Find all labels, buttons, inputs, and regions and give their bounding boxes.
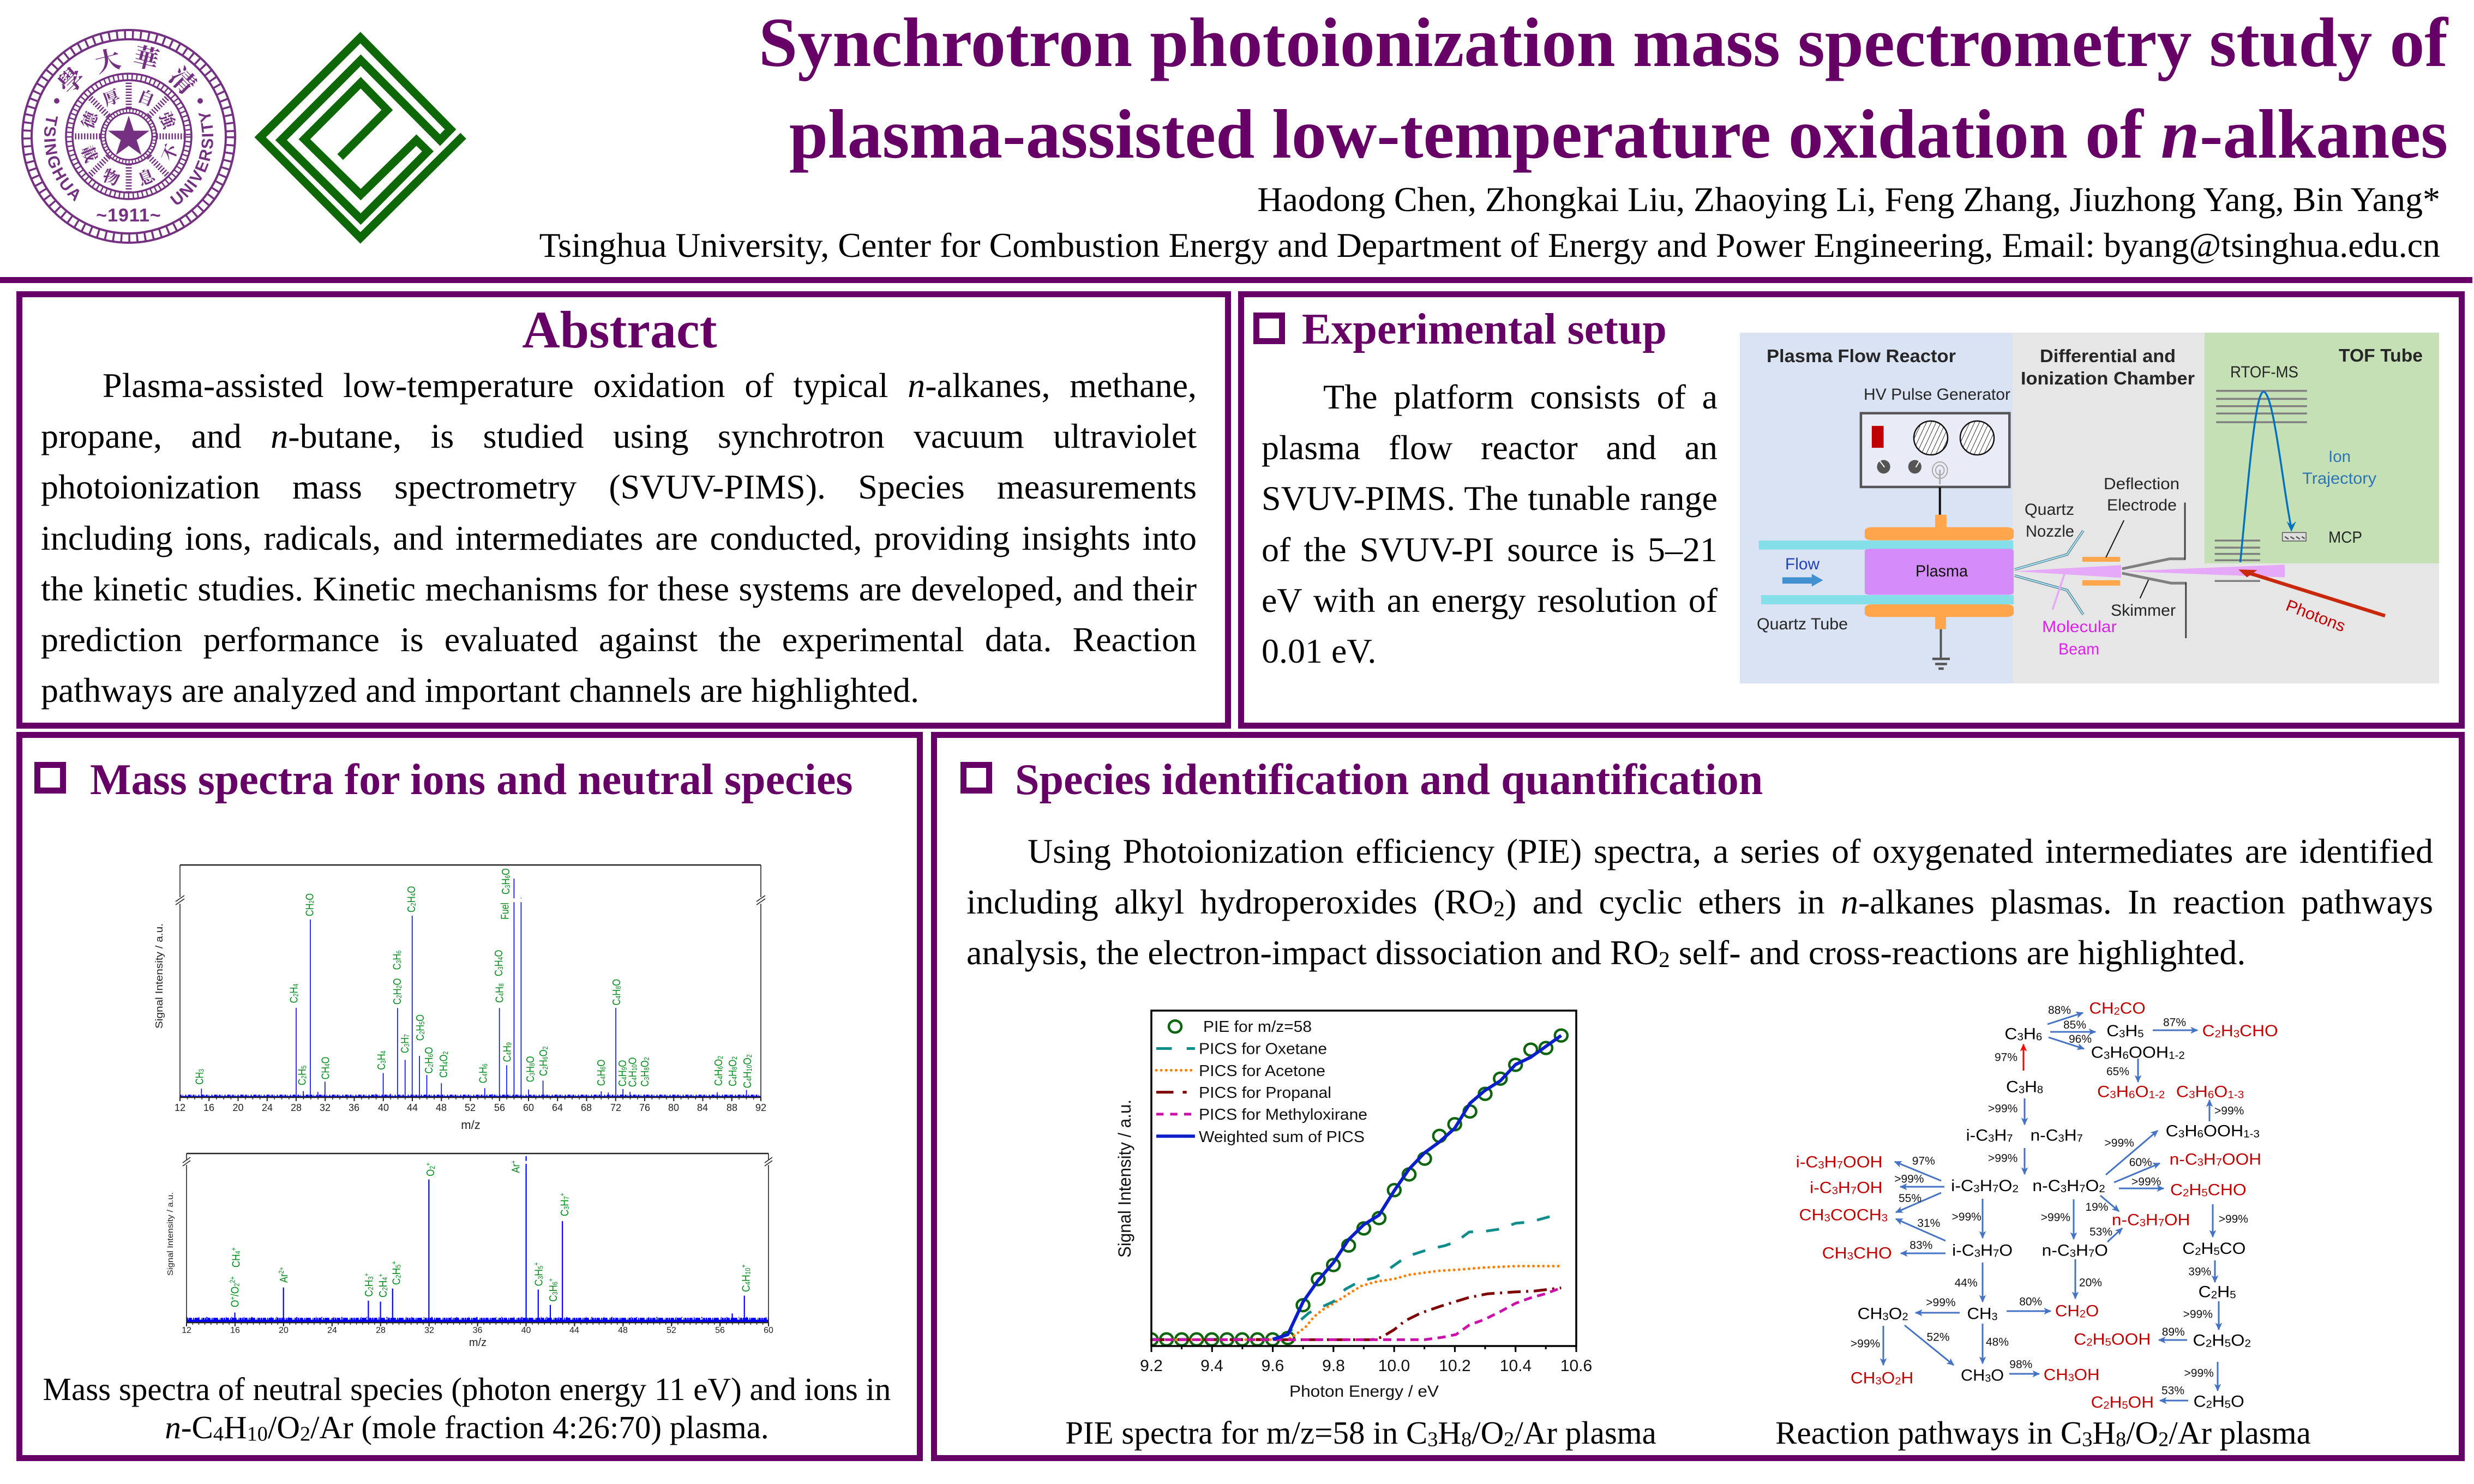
pathway arrows [1883,1013,2219,1401]
heading: experimental setup: Experimental setup [1302,305,1667,353]
component labels: HV Pulse Generator [1864,386,2010,404]
axis labels: 44 [569,1326,579,1335]
intermediate species: C3H6OOH 1-3 [2166,1122,2260,1140]
component labels: MCP [2328,528,2362,546]
intermediate species: i-C3H7 [1966,1126,2013,1144]
ion labels: C2H3+ [362,1273,375,1297]
component labels: Skimmer [2111,602,2176,620]
component labels: Plasma [1915,562,1968,580]
caption: reaction pathways: Reaction pathways in C3H8/O2/Ar plasma [1775,1415,2311,1451]
axis labels: 28 [376,1326,386,1335]
component labels: Trajectory [2302,470,2376,488]
experimental setup text: plasma flow reactor and an [1262,428,1718,467]
logo: Tsinghua University seal [21,29,236,244]
caption: mass spectra: Mass spectra of neutral species (photon energy 11 eV) and ions in [43,1371,891,1407]
branching percentages: >99% [1926,1296,1956,1309]
heading: species identification: Species identification and quantification [1015,756,1763,804]
branching percentages: >99% [2183,1308,2213,1321]
component labels: Electrode [2107,496,2177,514]
experimental setup text: 0.01 eV. [1262,632,1376,670]
intermediate species: C3H8 [2006,1078,2043,1096]
branching percentages: 53% [2161,1385,2184,1397]
logo: Tsinghua University seal: 厚 [99,82,123,111]
axis labels: 76 [639,1102,650,1113]
branching percentages: 55% [1899,1192,1921,1205]
species labels: C4H6 [478,1064,490,1083]
chart: reaction pathways [1796,1000,2278,1411]
branching percentages: >99% [1894,1173,1924,1185]
axis labels: 28 [291,1102,302,1113]
species labels: C4H6O2 [713,1056,725,1086]
experimental setup text [1262,377,1718,670]
axis labels: 92 [755,1102,766,1113]
branching percentages: 89% [2162,1326,2185,1338]
logo: Tsinghua University seal: 物 [100,162,124,190]
species labels: CH3 [194,1069,206,1085]
axis labels: 80 [668,1102,679,1113]
component labels [1757,363,2376,658]
species labels [194,868,754,1088]
axis labels: 10.2 [1439,1357,1471,1375]
product species in red: C2H5OH [2091,1393,2154,1411]
axis labels: 44 [407,1102,418,1113]
ion labels: Ar2+ [277,1267,290,1283]
intermediate species: i-C3H7O [1952,1242,2013,1260]
axis labels [1140,1357,1592,1375]
ion labels: C3H7+ [558,1193,571,1216]
component labels: Ion [2328,448,2351,466]
peaks [187,1156,768,1323]
ion labels: C2H4+ [376,1273,389,1297]
logo: Tsinghua University seal: UNIVERSITY [170,113,214,205]
species labels: CH4O [320,1057,332,1079]
component labels: Quartz Tube [1757,615,1848,633]
logo: Tsinghua University seal: 強 [154,107,183,133]
branching percentages: >99% [2184,1367,2214,1379]
intermediate species: C2H5O2 [2193,1332,2251,1350]
schematic: experimental apparatus [1740,333,2439,683]
branching percentages: >99% [1851,1338,1880,1350]
logo: Tsinghua University seal: 不 [154,140,183,164]
branching percentages: 85% [2063,1019,2086,1031]
axis labels: 32 [320,1102,331,1113]
component labels: Photons [2283,597,2348,635]
section titles: Ionization Chamber [2021,368,2195,388]
authors and affiliation: Haodong Chen, Zhongkai Liu, Zhaoying Li, Feng Zhang, Jiuzhong Yang, Bin Yang* [1257,180,2440,219]
species labels: C2H5O [415,1014,427,1041]
branching percentages: 19% [2085,1201,2108,1213]
axis labels [182,1326,773,1349]
section titles: Plasma Flow Reactor [1767,346,1956,366]
peaks [180,879,761,1097]
product species in red: CH2CO [2089,1000,2146,1018]
product species in red [1796,1000,2278,1411]
ion labels: C4H10+ [740,1264,753,1292]
species labels: C2H4 [288,984,300,1003]
legend text: PICS for Acetone [1199,1062,1325,1080]
title [759,4,2449,173]
axis labels: 16 [230,1326,240,1335]
branching percentages: >99% [2041,1211,2070,1224]
branching percentages: 88% [2048,1004,2071,1017]
axis labels: 52 [465,1102,476,1113]
axis labels: 60 [523,1102,534,1113]
section titles: Differential and [2040,346,2176,366]
product species in red: CH3O2H [1851,1369,1913,1387]
abstract text: propane, and n-butane, is studied using synchrotron vacuum ultraviolet [41,417,1197,455]
branching percentages: 98% [2009,1358,2032,1371]
species labels: C4H10O [627,1058,639,1087]
ion labels: O2+ [424,1163,437,1176]
legend text [1199,1018,1367,1146]
axis labels: 12 [182,1326,191,1335]
axis labels: 32 [424,1326,434,1335]
branching percentages: 60% [2129,1156,2152,1169]
intermediate species: i-C3H7O2 [1951,1177,2019,1195]
branching percentages: 20% [2079,1277,2102,1289]
branching percentages: >99% [1988,1152,2017,1165]
intermediate species: CH3 [1967,1305,1998,1323]
chart: neutral species mass spectrum [154,864,766,1132]
species labels: CH4O2 [438,1052,450,1078]
species labels: C2H6O2 [538,1046,550,1076]
caption: PIE spectra: PIE spectra for m/z=58 in C3H8/O2/Ar plasma [1065,1415,1656,1451]
legend text: PICS for Methyloxirane [1199,1106,1367,1123]
species labels: C4H9O [617,1060,629,1086]
axis labels: 20 [232,1102,244,1113]
axis labels: 40 [521,1326,531,1335]
axis labels: 10.0 [1378,1357,1410,1375]
component labels: Deflection [2104,475,2179,493]
axis labels: 24 [262,1102,273,1113]
product species in red: i-C3H7OOH [1796,1153,1883,1171]
legend text: PICS for Propanal [1199,1084,1331,1102]
ion labels: C3H5+ [532,1262,545,1286]
component labels: Quartz [2025,501,2074,519]
panel: abstract [16,291,1231,729]
product species in red: C2H5OOH [2074,1331,2151,1349]
product species in red: CH2O [2055,1302,2099,1320]
species labels: C3H6 [391,951,403,970]
intermediate species: C2H5 [2199,1283,2236,1301]
axis labels: 9.2 [1140,1357,1163,1375]
branching percentages: >99% [1951,1211,1981,1223]
logo: Tsinghua University seal: 學 [49,58,92,101]
logo: Tsinghua University seal: 華 [130,37,163,77]
heading: abstract: Abstract [522,301,717,359]
logo: Tsinghua University seal: 清 [163,58,206,101]
branching percentages: >99% [2104,1137,2134,1149]
branching percentages: 87% [2163,1016,2186,1029]
intermediate species: C3H5 [2106,1022,2144,1040]
ion labels: O+/O22+ [228,1276,241,1307]
ion labels [228,1160,753,1307]
chart: neutral species mass spectrum: Signal Intensity / a.u. [154,923,165,1029]
experimental setup text: SVUV-PIMS. The tunable range [1262,479,1718,518]
species labels: Fuel [500,903,512,920]
species labels: C2H4O [406,886,418,912]
legend symbols [1156,1020,1195,1136]
branching percentages: 52% [1926,1331,1950,1343]
logo: Tsinghua University seal: 德 [74,106,103,131]
ion labels: Ar+ [509,1160,522,1173]
abstract text: photoionization mass spectrometry (SVUV-PIMS). Species measurements [41,467,1197,506]
caption: mass spectra [43,1371,891,1445]
logo: Tsinghua University seal: 息 [134,161,159,190]
axis labels: 24 [327,1326,337,1335]
logo: Tsinghua University seal: 載 [76,141,105,165]
chart: ion mass spectrum: Signal Intensity / a.u. [166,1192,175,1276]
title: Synchrotron photoionization mass spectrometry study of [759,4,2448,81]
logo: Tsinghua University seal: TSINGHUA [44,116,80,202]
product species in red: C3H6O1-2 [2097,1083,2165,1101]
species labels: C3H4O [493,950,505,976]
intermediate species: n-C3H7O [2042,1242,2108,1260]
section titles: TOF Tube [2339,345,2423,365]
axis labels: 36 [473,1326,482,1335]
axis labels: 36 [349,1102,359,1113]
legend text: Weighted sum of PICS [1199,1128,1365,1146]
branching percentages: >99% [2131,1175,2161,1188]
branching percentages: 96% [2069,1033,2092,1046]
ion labels: C2H5+ [389,1261,403,1285]
axis labels: 64 [552,1102,563,1113]
axis labels: 9.8 [1322,1357,1345,1375]
product species in red: CH3CHO [1822,1244,1892,1262]
intermediate species: n-C3H7O2 [2032,1177,2105,1195]
species text: Using Photoionization efficiency (PIE) spectra, a series of oxygenated intermediates are identified [1028,832,2433,870]
branching percentages: >99% [1988,1103,2017,1115]
intermediate species: C3H6 [2004,1025,2042,1043]
intermediate species: C2H5O [2194,1393,2244,1411]
logo: Tsinghua University seal: 大 [91,39,124,80]
branching percentages: 83% [1909,1239,1932,1252]
axis labels: m/z [469,1337,487,1349]
branching percentages: 65% [2106,1066,2129,1078]
species labels: C3H6O [500,868,512,894]
title: plasma-assisted low-temperature oxidation of n-alkanes [789,95,2448,173]
heading icon: checkbox [34,762,66,794]
species labels: C3H8O2 [639,1057,651,1086]
intermediate species [1858,1022,2260,1411]
chart: PIE spectra [1115,1010,1592,1401]
axis labels: 9.4 [1200,1357,1223,1375]
branching percentages [1851,1004,2248,1397]
product species in red: C3H6O1-3 [2176,1083,2244,1101]
species labels: C4H8O2 [727,1056,739,1086]
branching percentages: 80% [2019,1295,2042,1308]
branching percentages: 44% [1955,1277,1978,1289]
axis labels: 48 [618,1326,628,1335]
authors and affiliation [539,180,2440,265]
panel: species identification and quantification [931,732,2465,1461]
intermediate species: CH3O2 [1858,1305,1908,1323]
component labels: Flow [1785,555,1820,573]
panel: mass spectra [16,732,923,1461]
species labels: C4H9 [501,1042,513,1062]
chart: PIE spectra: Photon Energy / eV [1289,1383,1439,1401]
species labels: C4H8 [494,983,506,1003]
chart: PIE spectra: Signal Intensity / a.u. [1115,1100,1134,1258]
axis labels: 10.6 [1560,1357,1592,1375]
abstract text [41,366,1197,710]
abstract text: the kinetic studies. Kinetic mechanisms for these systems are developed, and their [41,569,1197,608]
abstract text: pathways are analyzed and important channels are highlighted. [41,671,919,710]
heading: mass spectra: Mass spectra for ions and neutral species [90,756,852,804]
axis labels: 68 [581,1102,592,1113]
branching percentages: 39% [2188,1266,2211,1278]
axis labels: 88 [726,1102,737,1113]
ion labels: CH4+ [230,1247,243,1267]
logo: green diamond emblem [254,32,466,244]
branching percentages: 48% [1986,1336,2009,1348]
heading icon: checkbox [1253,313,1285,344]
axis labels: 40 [378,1102,389,1113]
product species in red: CH3COCH 3 [1799,1206,1888,1224]
legend text: PIE for m/z=58 [1203,1018,1312,1036]
heading icon: checkbox [960,762,992,794]
axis labels: 20 [279,1326,289,1335]
intermediate species: C3H6OOH 1-2 [2091,1043,2185,1061]
species text [966,832,2433,972]
product species in red: n-C3H7OOH [2170,1150,2261,1168]
PICS curves [1151,1036,1561,1339]
intermediate species: C2H5CO [2182,1240,2245,1258]
abstract text: Plasma-assisted low-temperature oxidation of typical n-alkanes, methane, [103,366,1197,405]
axis labels: 16 [203,1102,214,1113]
axis labels: m/z [461,1118,481,1132]
component labels: Beam [2058,640,2099,658]
ion labels: C3H6+ [547,1278,560,1302]
branching percentages: >99% [2214,1104,2244,1117]
species labels: C4H10O2 [742,1054,754,1088]
legend text: PICS for Oxetane [1199,1041,1327,1058]
axis labels: 56 [494,1102,505,1113]
branching percentages: 97% [1912,1155,1935,1167]
species labels: C3H8O [525,1056,537,1082]
component labels: RTOF-MS [2230,363,2298,381]
authors and affiliation: Tsinghua University, Center for Combustion Energy and Department of Energy and Power Engineering, Email: byang@tsinghua.edu.cn [539,226,2440,265]
experimental setup text: of the SVUV-PI source is 5–21 [1262,530,1718,569]
species labels: C4H8O [611,979,623,1005]
species labels: C3H7 [399,1034,411,1053]
intermediate species: n-C3H7 [2031,1126,2083,1144]
product species in red: C2H5CHO [2170,1181,2247,1199]
branching percentages: 97% [1995,1052,2017,1064]
PIE data points [1145,1030,1568,1345]
branching percentages: 53% [2089,1226,2112,1239]
abstract text: prediction performance is evaluated against the experimental data. Reaction [41,620,1197,659]
species labels: C3H4 [376,1050,388,1070]
branching percentages: >99% [2219,1213,2248,1225]
axis labels: 60 [764,1326,773,1335]
product species in red: i-C3H7OH [1810,1179,1883,1197]
caption: mass spectra: n-C4H10/O2/Ar (mole fraction 4:26:70) plasma. [165,1409,769,1445]
species labels: C2H2O [392,978,404,1005]
branching percentages: 31% [1917,1217,1940,1229]
product species in red: C2H3CHO [2202,1022,2278,1040]
species labels: C2H5 [297,1066,309,1085]
component labels: Nozzle [2026,522,2074,540]
chart: ion mass spectrum [166,1153,773,1349]
experimental setup text: The platform consists of a [1323,377,1718,416]
axis labels: 84 [697,1102,708,1113]
section titles [1767,345,2423,388]
species text: analysis, the electron-impact dissociation and RO2 self- and cross-reactions are highlighted. [966,933,2245,972]
axis labels: 56 [715,1326,725,1335]
axis labels: 9.6 [1262,1357,1284,1375]
species labels: C2H6O [423,1047,435,1074]
species text: including alkyl hydroperoxides (RO2) and cyclic ethers in n-alkanes plasmas. In reaction pathways [966,882,2433,921]
axis labels [175,1102,766,1132]
logo: Tsinghua University seal: 自 [135,82,159,111]
species labels: CH2O [304,893,316,916]
product species in red: n-C3H7OH [2112,1211,2190,1229]
axis labels: 10.4 [1500,1357,1532,1375]
reactor hardware [1759,391,2385,670]
logo: Tsinghua University seal: ~1911~ [96,205,161,226]
component labels: Molecular [2042,618,2117,636]
axis labels: 72 [610,1102,621,1113]
axis labels: 12 [175,1102,185,1113]
abstract text: including ions, radicals, and intermediates are conducted, providing insights into [41,519,1197,557]
panel: experimental setup [1238,291,2465,729]
species labels: C4H6O [596,1060,608,1086]
product species in red: CH3OH [2044,1366,2100,1384]
axis labels: 52 [666,1326,676,1335]
axis labels: 48 [436,1102,447,1113]
intermediate species: CH3O [1961,1367,2004,1385]
experimental setup text: eV with an energy resolution of [1262,581,1718,620]
